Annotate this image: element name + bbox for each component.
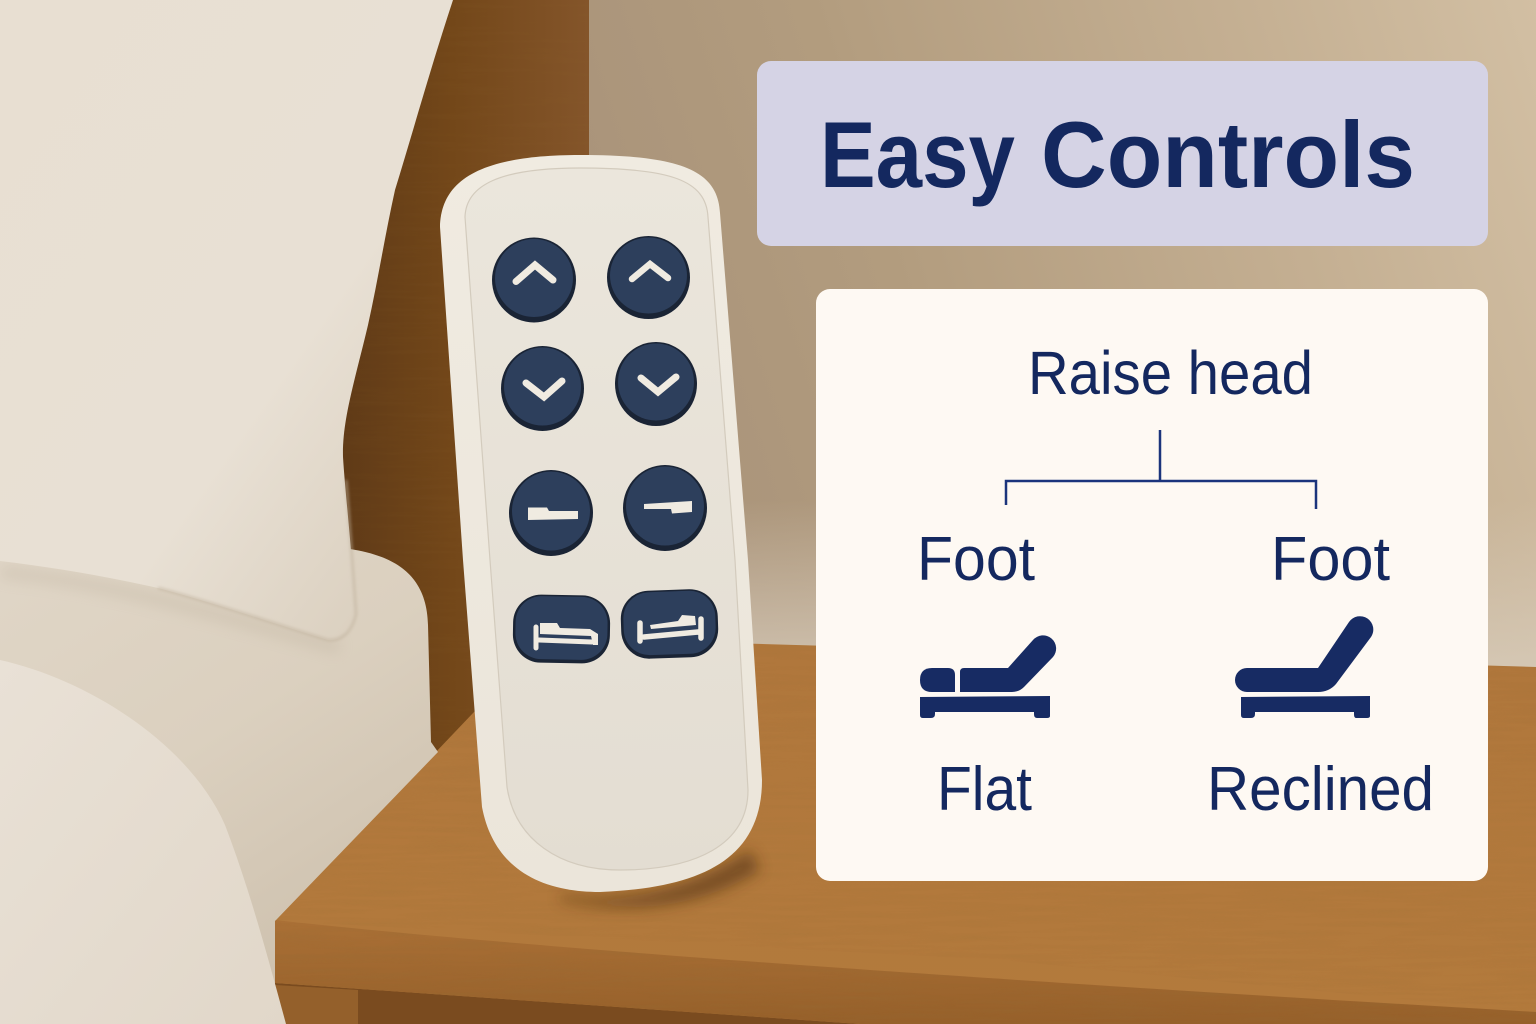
connector lines bbox=[1006, 430, 1316, 509]
label: raise head: Raise head bbox=[1028, 339, 1313, 407]
title banner bbox=[757, 61, 1488, 246]
label: flat: Flat bbox=[937, 755, 1032, 824]
label: reclined: Reclined bbox=[1207, 755, 1434, 824]
nightstand bbox=[275, 638, 1536, 1024]
wall background bbox=[0, 0, 1536, 740]
button: head down right bbox=[615, 342, 697, 426]
pillow bbox=[0, 0, 453, 648]
panel: bed position diagram bbox=[816, 289, 1488, 881]
button: foot left bbox=[509, 470, 593, 556]
title text bbox=[820, 102, 1415, 207]
button: head up left bbox=[492, 238, 576, 322]
button: foot right bbox=[623, 465, 707, 551]
blanket bbox=[0, 660, 286, 1024]
remote control bbox=[440, 155, 762, 908]
button: flat preset bbox=[512, 594, 611, 664]
button: head up right bbox=[607, 236, 690, 319]
icon: reclined bed bbox=[1235, 616, 1373, 718]
label: foot left: Foot bbox=[917, 525, 1035, 594]
title text: Controls bbox=[1041, 102, 1415, 207]
bed mattress sheet bbox=[0, 549, 438, 1024]
title text: Easy bbox=[820, 102, 1015, 207]
icon: flat bed bbox=[920, 635, 1056, 718]
wooden headboard bbox=[340, 0, 589, 800]
button: recline preset bbox=[620, 588, 719, 660]
label: foot right: Foot bbox=[1271, 525, 1390, 594]
button: head down left bbox=[501, 346, 584, 431]
